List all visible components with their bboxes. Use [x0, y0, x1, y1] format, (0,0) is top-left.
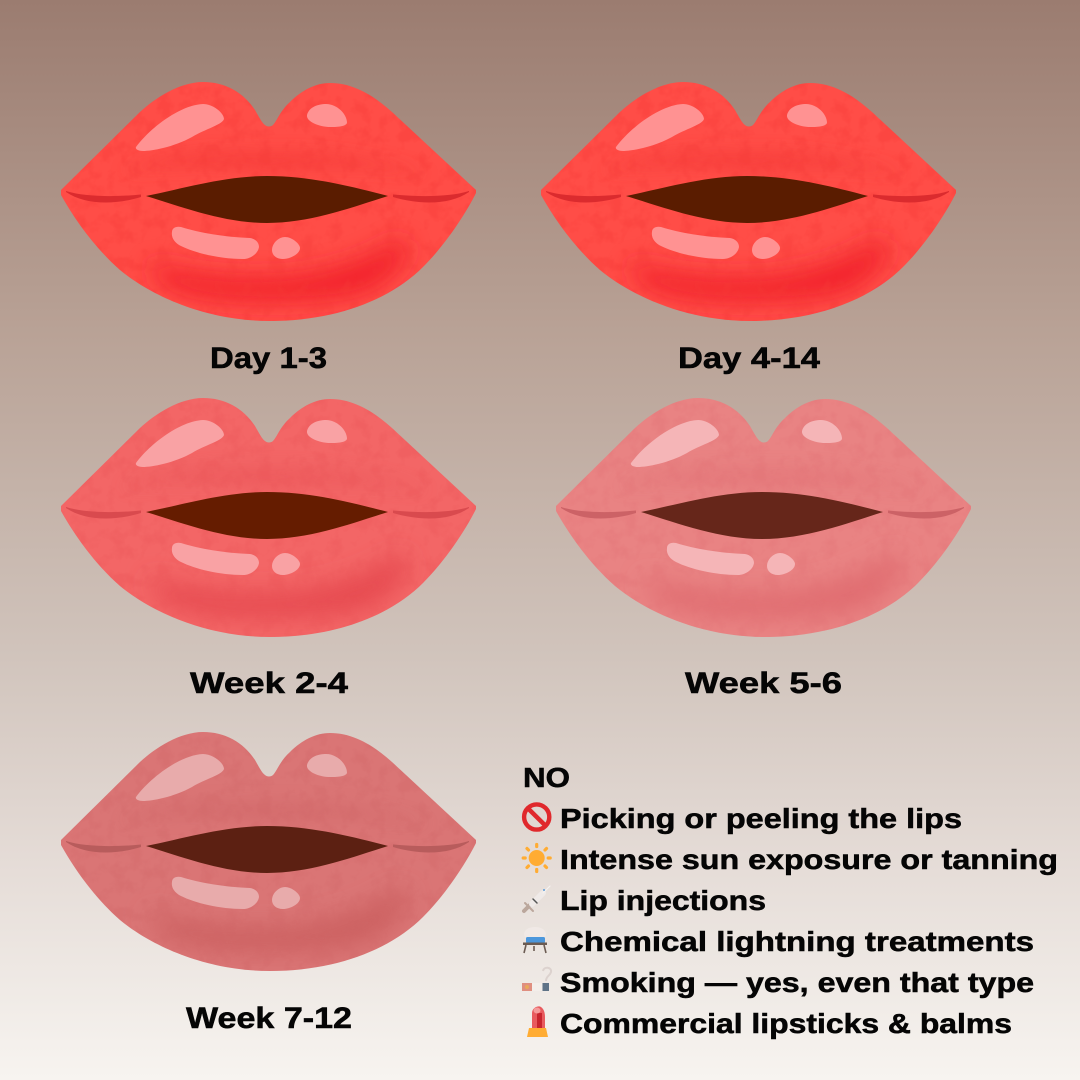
lip shape: [61, 398, 476, 637]
lip crease right: [393, 507, 469, 518]
mouth opening: [641, 492, 883, 539]
mouth opening: [146, 176, 388, 223]
item: smoking: Smoking — yes, even that type: [560, 967, 1034, 998]
lip shape: [61, 82, 476, 321]
lip crease left: [66, 191, 141, 202]
lip shading: [81, 400, 469, 636]
highlights: [136, 754, 347, 909]
list: things to avoid: [522, 762, 1058, 1039]
icon: lipstick: [527, 1006, 548, 1037]
lip crease right: [873, 191, 949, 202]
lip shape: [61, 732, 476, 971]
highlights: [136, 104, 347, 259]
label: Day 1-3: Day 1-3: [210, 342, 327, 375]
lip crease left: [546, 191, 621, 202]
lip crease right: [393, 841, 469, 852]
lips: Day 1-3: [55, 78, 480, 324]
lip shape: [541, 82, 956, 321]
item: lip injections: Lip injections: [560, 885, 766, 916]
lip crease left: [561, 507, 636, 518]
item: sun exposure: Intense sun exposure or tanning: [560, 844, 1058, 875]
label: Day 4-14: Day 4-14: [678, 342, 820, 375]
lips: Week 2-4: [55, 394, 480, 640]
lip shading: [561, 84, 950, 320]
lip crease left: [66, 841, 141, 852]
mouth opening: [146, 492, 388, 539]
lip crease right: [888, 507, 964, 518]
lip crease right: [393, 191, 469, 202]
lip shape: [556, 398, 971, 637]
icon: cigarette: [522, 968, 551, 991]
highlights: [616, 104, 827, 259]
label: Week 2-4: Week 2-4: [190, 667, 348, 700]
icon: treatment chair: [523, 927, 547, 953]
lip shading: [81, 84, 470, 320]
highlights: [631, 420, 842, 575]
highlights: [136, 420, 347, 575]
icon: sun: [523, 844, 550, 872]
label: Week 7-12: Week 7-12: [186, 1002, 352, 1035]
lips: Week 7-12: [55, 728, 480, 974]
list heading: NO: [523, 762, 570, 793]
lip crease left: [66, 507, 141, 518]
icon: syringe: [524, 886, 550, 911]
mouth opening: [146, 826, 388, 873]
lip shading: [645, 463, 908, 636]
item: lipsticks and balms: Commercial lipsticks & balms: [560, 1008, 1012, 1039]
mouth opening: [626, 176, 868, 223]
lips: Week 5-6: [550, 394, 975, 640]
item: picking: Picking or peeling the lips: [560, 803, 962, 834]
lips: Day 4-14: [535, 78, 960, 324]
item: chemical treatments: Chemical lightning treatments: [560, 926, 1034, 957]
icon: prohibited sign: [524, 804, 549, 830]
lip shading: [81, 734, 470, 970]
label: Week 5-6: Week 5-6: [685, 667, 842, 700]
